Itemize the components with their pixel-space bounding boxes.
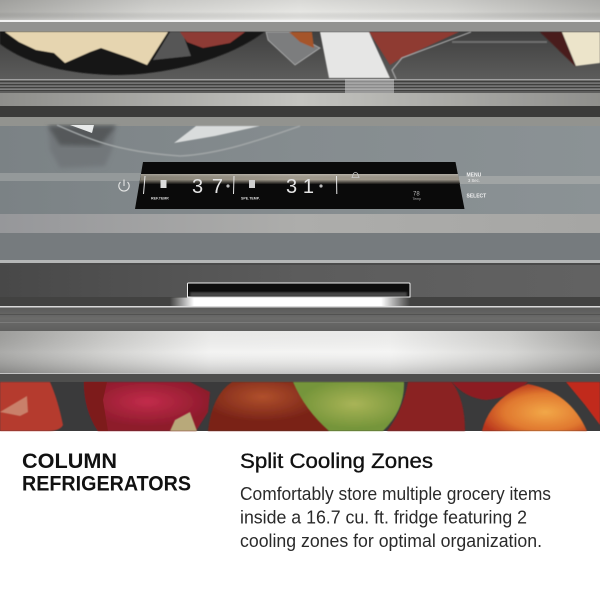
door handle recess	[0, 263, 600, 306]
ref temp label: REF.TEMP.	[151, 196, 169, 200]
menu and select labels: MENU	[466, 173, 482, 179]
fridge icon left	[160, 180, 166, 188]
title: column refrigerators	[22, 450, 191, 496]
steel lower rail	[0, 93, 600, 117]
title: column refrigerators: COLUMN	[22, 450, 117, 473]
temperature readout 37: 37	[192, 176, 223, 198]
degree marks	[226, 184, 230, 188]
reflections	[48, 126, 116, 168]
temperature readout 31: 31	[286, 176, 314, 198]
green mango	[293, 382, 404, 431]
spe temp label: SPE.TEMP.	[241, 196, 260, 200]
dividers	[144, 176, 337, 194]
menu and select labels: SELECT	[466, 193, 486, 199]
ridged drawer rail	[0, 79, 600, 93]
photo: refrigerator drawer interior with food	[0, 31, 600, 79]
menu and select labels	[466, 173, 486, 199]
heading: split cooling zones: Split Cooling Zones	[240, 450, 433, 473]
food: plastic wrapped salami	[266, 32, 600, 79]
dragon fruit left	[0, 382, 63, 431]
mango red	[208, 382, 329, 431]
food: black tray with pastry	[0, 31, 264, 75]
light bands	[0, 173, 145, 181]
menu and select labels: 3 Sec.	[468, 178, 480, 183]
body text: cooling zones for optimal organization.	[240, 531, 542, 551]
title: column refrigerators: REFRIGERATORS	[22, 472, 191, 496]
steel top trim	[0, 0, 600, 32]
temp small label: Temp	[412, 197, 421, 201]
body text: inside a 16.7 cu. ft. fridge featuring 2	[240, 508, 527, 528]
glass control panel	[0, 117, 600, 263]
body text: Comfortably store multiple grocery items	[240, 484, 551, 504]
temp small readout: 78	[413, 192, 420, 198]
dragon fruit centre	[84, 382, 210, 431]
photo: fruit drawer	[0, 382, 600, 431]
power icon	[119, 180, 129, 191]
fridge icon right	[249, 180, 255, 188]
display panel	[135, 162, 464, 209]
red fruit back	[452, 382, 528, 400]
red fruit right	[566, 382, 600, 425]
bell icon	[352, 172, 359, 178]
dark red mango	[387, 382, 465, 431]
peach	[482, 384, 587, 431]
brushed dark steel band	[0, 306, 600, 331]
body text	[240, 484, 551, 551]
bright steel band	[0, 331, 600, 382]
